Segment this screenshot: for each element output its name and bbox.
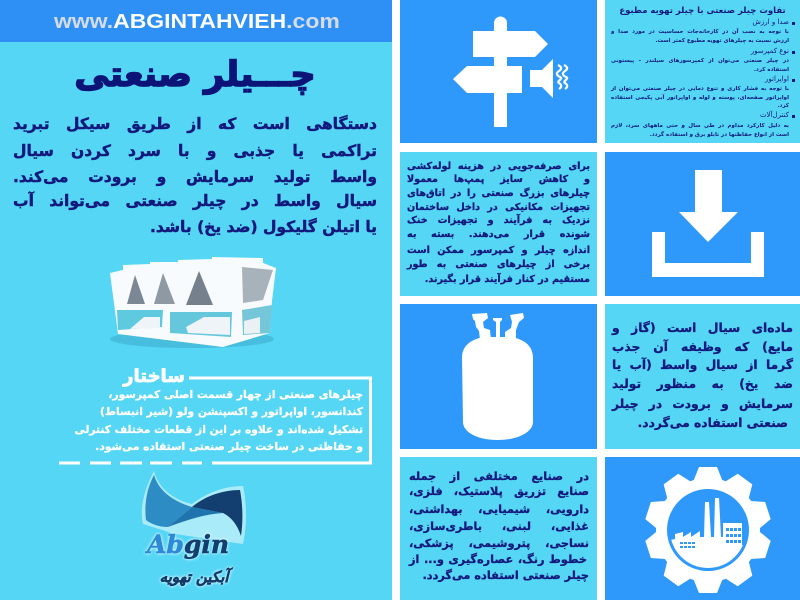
- panel: industries text: غذایی، لبنی، باطری‌سازی،: [409, 520, 589, 533]
- panel: installation location text: شونده قرار می‌دهند. بسته به: [407, 229, 590, 240]
- panel: installation location text: نزدیک به فرآیند و تجهیزات خنک: [407, 215, 590, 226]
- panel: comparison with HVAC chiller: [605, 0, 800, 143]
- text block: chiller definition: سیال واسط در چیلر صنعتی می‌تواند آب: [13, 192, 377, 210]
- comparison list: اواپراتور صفحه‌ای، پوسته و لوله و اواپراتور آبی پکیجی استفاده: [611, 95, 789, 101]
- comparison list: کرد.: [777, 103, 789, 109]
- icon tile: signpost with speaker: [400, 0, 597, 143]
- text block: chiller definition: واسط تولید سرمایش و برودت می‌کند.: [13, 168, 377, 186]
- panel: structure callout: [59, 366, 372, 464]
- comparison list: صدا و ارزش: [752, 18, 789, 26]
- text block: structure description: [74, 388, 364, 453]
- icon tile: factory gear: [605, 457, 800, 600]
- icon: gas cylinder: [462, 313, 533, 440]
- text block: structure description: تشکیل شده‌اند و علاوه بر این از قطعات مختلف کنترلی: [74, 423, 363, 436]
- text block: chiller definition: دستگاهی است که از طریق سیکل تبرید: [13, 115, 377, 133]
- panel: industries text: دارویی، شیمیایی، بهداشتی،: [409, 503, 589, 516]
- panel: industries text: صنایع تزریق پلاستیک، فلزی،: [409, 485, 589, 498]
- text block: structure description: کندانسور، اواپراتور و اکسپنشن ولو (شیر انبساط): [100, 405, 363, 418]
- panel: installation location text: اندازه چیلر و کمپرسور ممکن است: [407, 245, 590, 256]
- panel: refrigerant definition text: مایع) که وظیفه آن جذب: [612, 340, 793, 354]
- panel: refrigerant definition text: سرمایش و برودت در چیلر: [612, 397, 793, 411]
- comparison list: با توجه به نصب آن در کارخانه‌جات حساسیت در مورد صدا و: [611, 29, 789, 35]
- heading: ساختار: [123, 366, 185, 387]
- panel: refrigerant definition text: [605, 304, 800, 449]
- text block: structure description: چیلرهای صنعتی از چهار قسمت اصلی کمپرسور،: [108, 388, 363, 401]
- icon: signpost and sound: [453, 16, 568, 127]
- icon tile: download: [605, 152, 800, 296]
- panel: refrigerant definition text: ضد یخ) به منظور تولید: [612, 377, 793, 391]
- panel: industries text: چیلر صنعتی استفاده می‌گردد.: [423, 569, 589, 582]
- panel: installation location text: برخی از چیلرهای صنعتی به طور: [407, 259, 590, 270]
- comparison list: است از انواع حفاظتها در تابلو برق و استفاده گردد.: [650, 132, 789, 138]
- panel: installation location text: چیلرهای بزرگ صنعتی را در اتاق‌های: [407, 188, 590, 199]
- comparison list: نوع کمپرسور: [751, 47, 789, 55]
- panel: refrigerant definition text: صنعتی استفاده می‌گردد.: [638, 416, 788, 430]
- comparison list: با توجه به فشار کاری و تنوع دمایی در چیلر صنعتی می‌توان از: [611, 86, 789, 92]
- callout frame: [59, 376, 372, 464]
- panel: industries text: خطوط رنگ، عصاره‌گیری و... از: [409, 553, 587, 566]
- panel: refrigerant definition text: ماده‌ای سیال است (گاز و: [612, 321, 793, 335]
- panel: installation location text: مستقیم در کنار فرآیند قرار بگیرند.: [425, 274, 590, 285]
- logo wordmark: Abgin: [147, 530, 229, 559]
- comparison list: کنترل‌آلات: [760, 111, 789, 119]
- header bar with website address: [0, 0, 392, 42]
- icon tile: refrigerant cylinder: [400, 304, 597, 449]
- panel: refrigerant definition text: گرما از سیال واسط (آب یا: [612, 358, 793, 372]
- title: چـــیلر صنعتی: [74, 55, 316, 95]
- comparison list: [610, 18, 795, 138]
- panel: left column background: [0, 0, 392, 600]
- text block: chiller definition: یا اتیلن گلیکول (ضد یخ) باشد.: [150, 218, 377, 236]
- comparison list: ارزش نسبت به چیلرهای تهویه مطبوع کمتر است.: [655, 38, 789, 44]
- text block: chiller definition: تراکمی یا جذبی و با سرد کردن سیال: [13, 142, 377, 160]
- logo Persian name: آبکین تهویه: [160, 568, 228, 586]
- icon: gear with factory: [645, 467, 771, 593]
- panel: installation location text: تجهیزات مکانیکی در داخل ساختمان: [407, 202, 590, 213]
- comparison list: اواپراتور: [765, 75, 789, 83]
- panel: installation location text: و کاهش سایز پمپ‌ها معمولا: [407, 174, 590, 185]
- panel: installation location text: [400, 152, 597, 296]
- panel: industries text: در صنایع مختلفی از جمله: [409, 470, 589, 483]
- heading: تفاوت چیلر صنعتی با چیلر تهویه مطبوع: [619, 6, 786, 16]
- comparison list: در چیلر صنعتی می‌توان از کمپرسورهای سیلندر - پیستونی: [611, 58, 789, 64]
- comparison list: به دلیل کارکرد مداوم در طی سال و حتی ماههای سرد، لازم: [611, 123, 789, 129]
- logo mark: wave: [142, 471, 246, 544]
- text block: structure description: و حفاظتی در ساخت چیلر صنعتی استفاده می‌شود.: [95, 440, 363, 453]
- website address: www.ABGINTAHVIEH.com: [54, 10, 340, 33]
- illustration: industrial chiller unit: [110, 257, 276, 348]
- text block: chiller definition: [13, 114, 377, 236]
- logo: Abgin Tahvieh: [142, 471, 246, 588]
- icon: download arrow and tray: [652, 170, 764, 277]
- panel: industries text: نساجی، پتروشیمی، پزشکی،: [409, 537, 589, 550]
- panel: installation location text: برای صرفه‌جویی در هزینه لوله‌کشی: [407, 161, 590, 172]
- panel: industries text: [400, 457, 597, 600]
- comparison list: استفاده کرد.: [754, 67, 789, 73]
